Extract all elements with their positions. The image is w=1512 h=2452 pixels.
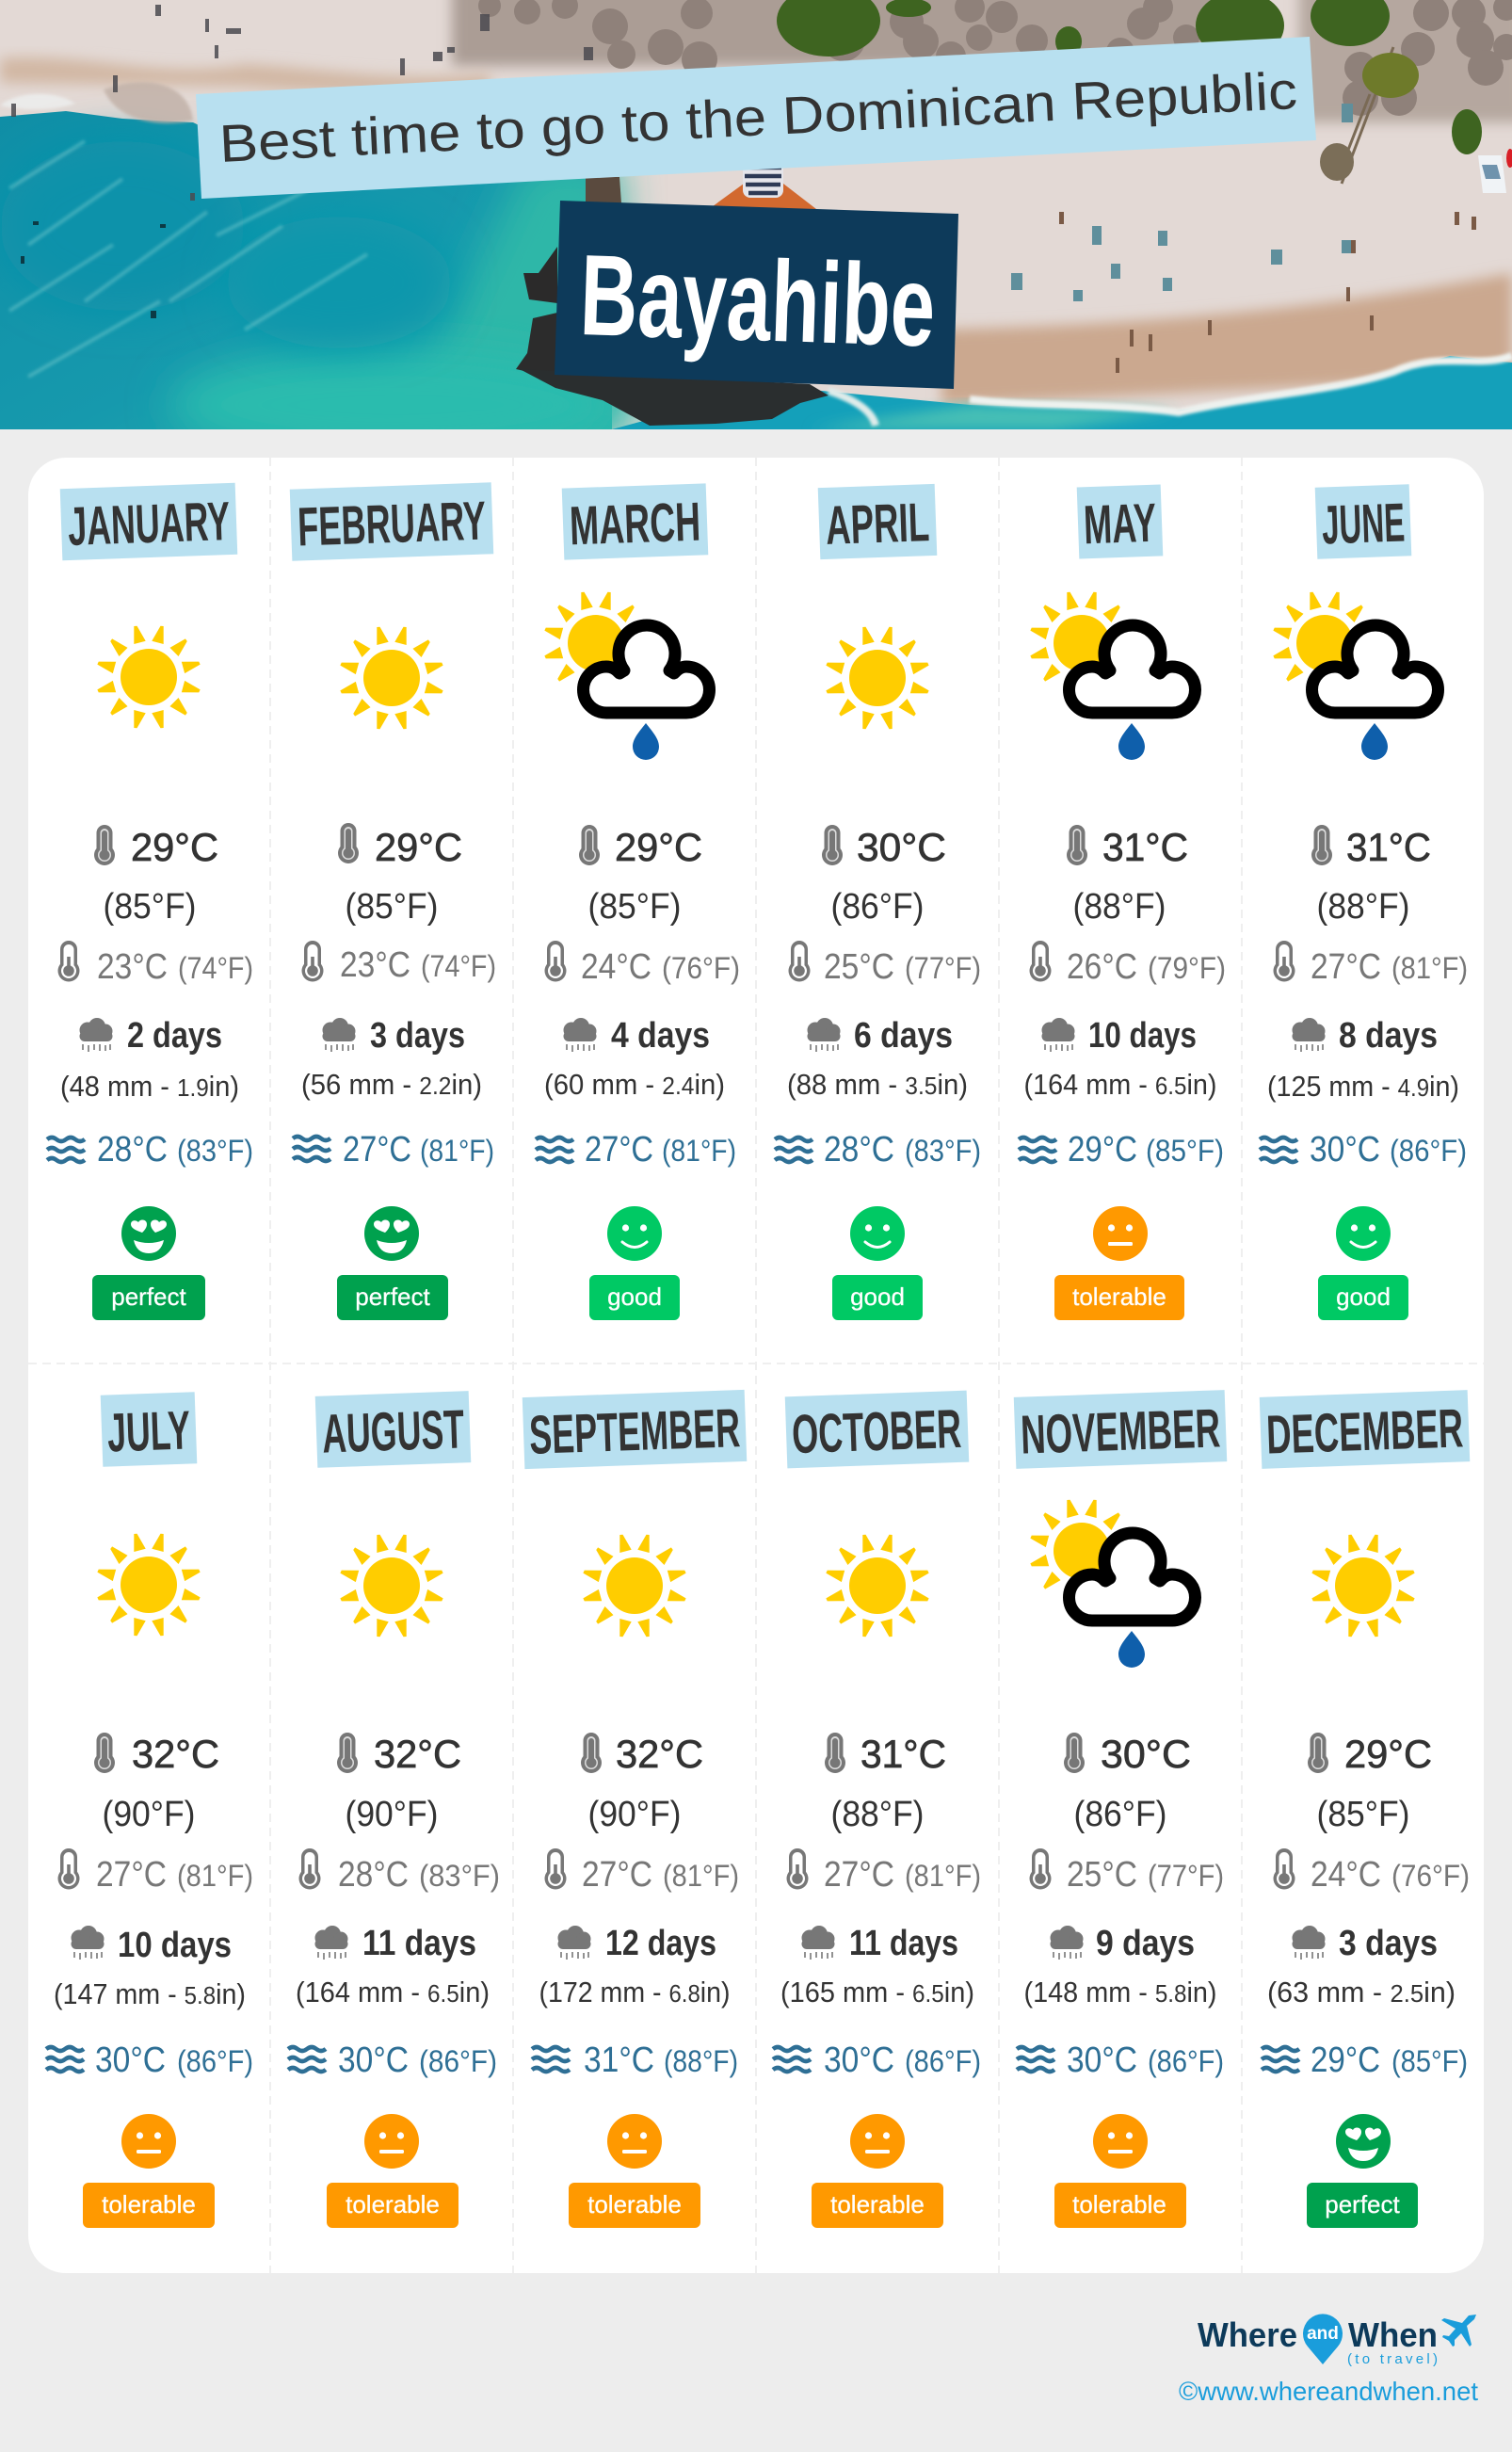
low temperature: (76°F) — [1391, 1859, 1470, 1893]
low temperature: 25°C — [1067, 1855, 1137, 1895]
location banner — [555, 201, 958, 389]
low temperature: (83°F) — [419, 1859, 500, 1893]
rainfall amount: (164 mm - 6.5in) — [1024, 1068, 1216, 1101]
sea temperature: 29°C — [1068, 1130, 1137, 1170]
sea temperature — [1017, 2041, 1224, 2080]
sea temperature: 27°C — [585, 1130, 653, 1170]
rainy days: 8 days — [1339, 1016, 1438, 1056]
high temperature — [1067, 825, 1188, 869]
panel: January — [47, 483, 253, 1320]
rainy days — [314, 1924, 476, 1963]
panel: May — [1019, 484, 1226, 1320]
month heading — [818, 484, 937, 559]
icon: sun — [97, 626, 201, 728]
high temperature — [94, 1732, 219, 1776]
low temperature: (76°F) — [662, 951, 740, 985]
sea temperature — [46, 2041, 253, 2080]
rainfall amount: (165 mm - 6.5in) — [780, 1976, 974, 2008]
low temperature: 23°C — [340, 945, 410, 985]
rainy days — [563, 1016, 710, 1056]
high temperature: 32°C — [132, 1732, 219, 1776]
rainfall amount: (63 mm - 2.5in) — [1267, 1976, 1456, 2008]
icon: sun, cloud and rain drop — [544, 592, 710, 760]
icon: sun, cloud and rain drop — [1030, 592, 1196, 760]
icon: sun — [97, 1534, 201, 1636]
rating badge: perfect: perfect — [355, 1282, 431, 1311]
sea temperature: 30°C — [95, 2041, 166, 2080]
rating badge: tolerable: tolerable — [830, 2190, 925, 2218]
hero photo: aerial beach — [0, 0, 1512, 461]
rainy days: 6 days — [854, 1016, 953, 1056]
rating badge: tolerable: tolerable — [346, 2190, 440, 2218]
rainfall amount: (148 mm - 5.8in) — [1024, 1976, 1216, 2008]
low temperature: 26°C — [1067, 947, 1137, 987]
low temperature: (77°F) — [905, 951, 981, 985]
panel: April — [775, 484, 981, 1320]
low temperature — [1030, 941, 1226, 987]
rating face: perfect — [1336, 2114, 1391, 2169]
rainy days: 10 days — [118, 1926, 232, 1965]
low temperature: (77°F) — [1148, 1859, 1224, 1893]
low temperature: 27°C — [96, 1855, 167, 1895]
high temperature fahrenheit: (85°F) — [587, 887, 682, 927]
rainy days — [1292, 1016, 1438, 1056]
rainy days: 12 days — [605, 1924, 716, 1963]
panel: September — [523, 1390, 747, 2228]
location banner: Bayahibe — [578, 231, 937, 370]
rainy days — [79, 1016, 222, 1056]
high temperature — [338, 823, 462, 869]
high temperature: 30°C — [857, 825, 946, 869]
rainy days — [1292, 1924, 1438, 1963]
logo: Where and When: When — [1348, 2315, 1438, 2354]
sea temperature: (81°F) — [420, 1134, 494, 1168]
rating badge: tolerable — [812, 2183, 943, 2228]
month heading: OCTOBER — [791, 1398, 962, 1465]
rating badge: tolerable: tolerable — [102, 2190, 196, 2218]
rating badge: tolerable — [1054, 2183, 1186, 2228]
icon: map pin with and — [1303, 2314, 1343, 2364]
month heading: NOVEMBER — [1020, 1397, 1221, 1466]
panel: climate table card — [28, 458, 1484, 2273]
rainfall amount: (172 mm - 6.8in) — [539, 1976, 731, 2008]
sea temperature — [532, 2041, 738, 2080]
title banner: Best time to go to the Dominican Republic — [217, 60, 1298, 173]
month heading: JULY — [106, 1399, 191, 1464]
high temperature: 32°C — [374, 1732, 461, 1776]
rating badge: good: good — [1336, 1282, 1391, 1311]
rating badge: tolerable — [327, 2183, 458, 2228]
low temperature — [787, 1848, 981, 1895]
sea temperature: (88°F) — [664, 2044, 738, 2078]
sea temperature — [293, 1130, 494, 1170]
panel: February — [290, 482, 496, 1320]
rating face: good — [607, 1206, 662, 1261]
rainy days: 11 days — [849, 1924, 958, 1963]
sea temperature: (86°F) — [177, 2044, 253, 2078]
rainy days — [557, 1924, 716, 1963]
rating badge: tolerable: tolerable — [1072, 1282, 1166, 1311]
rainy days — [802, 1924, 958, 1963]
sea temperature: (83°F) — [177, 1134, 253, 1168]
low temperature — [789, 941, 981, 987]
rainfall amount: (56 mm - 2.2in) — [301, 1068, 482, 1101]
icon: sun — [1311, 1535, 1415, 1637]
logo: Where and When: (to travel) — [1347, 2351, 1438, 2367]
icon: sun — [826, 1535, 929, 1637]
month heading — [290, 482, 493, 561]
rainy days — [1051, 1924, 1195, 1963]
rating badge: perfect: perfect — [111, 1282, 187, 1311]
sea temperature: (86°F) — [419, 2044, 497, 2078]
high temperature fahrenheit: (90°F) — [345, 1795, 439, 1834]
low temperature: (79°F) — [1148, 951, 1226, 985]
month heading: AUGUST — [321, 1398, 465, 1465]
icon: sun, cloud and rain drop — [1273, 592, 1439, 760]
high temperature — [1064, 1732, 1191, 1776]
rating badge: tolerable: tolerable — [1072, 2190, 1166, 2218]
high temperature fahrenheit: (85°F) — [104, 887, 196, 927]
sea temperature: (81°F) — [662, 1134, 736, 1168]
rating badge: tolerable — [569, 2183, 700, 2228]
rating badge: perfect: perfect — [1325, 2190, 1401, 2218]
icon: sun — [583, 1535, 686, 1637]
low temperature — [58, 1848, 253, 1895]
rating badge: good: good — [850, 1282, 905, 1311]
high temperature: 29°C — [615, 825, 702, 869]
sea temperature: (86°F) — [1390, 1134, 1467, 1168]
high temperature: 30°C — [1101, 1732, 1191, 1776]
rating face: tolerable — [364, 2114, 419, 2169]
sea temperature: 28°C — [824, 1130, 894, 1170]
month heading — [1014, 1390, 1227, 1469]
sea temperature: 31°C — [584, 2041, 654, 2080]
high temperature fahrenheit: (86°F) — [830, 887, 925, 927]
high temperature: 29°C — [131, 825, 218, 869]
low temperature: 23°C — [97, 947, 168, 987]
rating badge: good: good — [607, 1282, 662, 1311]
high temperature fahrenheit: (88°F) — [830, 1795, 925, 1834]
month heading: MAY — [1083, 492, 1157, 556]
rating face: tolerable — [1093, 2114, 1148, 2169]
low temperature: 24°C — [1311, 1855, 1381, 1895]
high temperature fahrenheit: (90°F) — [587, 1795, 682, 1834]
month heading — [1077, 484, 1163, 559]
sea temperature: (86°F) — [1148, 2044, 1224, 2078]
rainy days: 3 days — [370, 1016, 465, 1056]
high temperature fahrenheit: (88°F) — [1073, 887, 1166, 927]
sea temperature: (86°F) — [905, 2044, 981, 2078]
sea temperature: 30°C — [824, 2041, 894, 2080]
sea temperature: (83°F) — [905, 1134, 981, 1168]
low temperature — [1030, 1848, 1224, 1895]
low temperature — [1273, 941, 1468, 987]
rainfall amount: (60 mm - 2.4in) — [544, 1068, 725, 1101]
high temperature: 29°C — [375, 825, 462, 869]
month heading — [101, 1392, 197, 1467]
rating badge: good — [832, 1275, 923, 1320]
sea temperature — [775, 1130, 981, 1170]
logo: Where and When — [1198, 2314, 1476, 2367]
sea temperature — [1262, 2041, 1468, 2080]
month heading: SEPTEMBER — [528, 1397, 741, 1466]
rating badge: tolerable — [83, 2183, 215, 2228]
panel: October — [773, 1391, 981, 2228]
rating face: perfect — [121, 1206, 176, 1261]
low temperature: (81°F) — [663, 1859, 739, 1893]
high temperature: 31°C — [1102, 825, 1188, 869]
low temperature: 25°C — [824, 947, 894, 987]
icon: sun, cloud and rain drop — [1030, 1500, 1196, 1668]
rating badge: perfect — [92, 1275, 205, 1320]
panel: August — [288, 1391, 500, 2228]
month heading: MARCH — [569, 492, 701, 557]
sea temperature — [288, 2041, 497, 2080]
sea temperature: (85°F) — [1146, 1134, 1224, 1168]
rainy days — [808, 1016, 953, 1056]
rainy days: 3 days — [1339, 1924, 1438, 1963]
website credit: ©www.whereandwhen.net — [1179, 2377, 1478, 2406]
high temperature — [825, 1732, 946, 1776]
low temperature — [58, 941, 253, 987]
sea temperature — [47, 1130, 253, 1170]
high temperature — [1311, 825, 1431, 869]
high temperature fahrenheit: (90°F) — [102, 1795, 196, 1834]
sea temperature — [773, 2041, 981, 2080]
rainy days — [72, 1926, 232, 1965]
low temperature: 27°C — [824, 1855, 894, 1895]
month heading — [785, 1391, 969, 1468]
rating face: tolerable — [1093, 1206, 1148, 1261]
rating face: tolerable — [121, 2114, 176, 2169]
low temperature — [544, 941, 740, 987]
rainfall amount: (48 mm - 1.9in) — [60, 1070, 239, 1103]
logo: Where and When: Where — [1198, 2315, 1297, 2354]
rating face: tolerable — [607, 2114, 662, 2169]
month heading: FEBRUARY — [297, 491, 487, 557]
sea temperature: (85°F) — [1391, 2044, 1468, 2078]
panel: March — [536, 483, 740, 1320]
high temperature fahrenheit: (86°F) — [1073, 1795, 1167, 1834]
panel: December — [1260, 1390, 1470, 2228]
rating face: perfect — [364, 1206, 419, 1261]
sea temperature — [536, 1130, 736, 1170]
low temperature — [544, 1848, 739, 1895]
rainy days: 11 days — [362, 1924, 476, 1963]
panel: November — [1014, 1390, 1227, 2228]
rainy days: 10 days — [1088, 1016, 1197, 1056]
low temperature: (74°F) — [178, 951, 253, 985]
sea temperature: 28°C — [97, 1130, 168, 1170]
sea temperature — [1260, 1130, 1467, 1170]
panel: July — [46, 1392, 253, 2228]
title banner — [196, 37, 1316, 199]
rainy days: 4 days — [611, 1016, 710, 1056]
rating badge: perfect — [1307, 2183, 1418, 2228]
low temperature: (74°F) — [421, 949, 496, 983]
low temperature: 27°C — [582, 1855, 652, 1895]
icon: map pin with and: and — [1307, 2324, 1339, 2344]
rainy days — [322, 1016, 465, 1056]
sea temperature: 30°C — [1067, 2041, 1137, 2080]
low temperature: 28°C — [338, 1855, 409, 1895]
month heading — [562, 483, 708, 560]
rating face: good — [850, 1206, 905, 1261]
high temperature: 31°C — [1346, 825, 1431, 869]
low temperature: (81°F) — [177, 1859, 253, 1893]
low temperature — [299, 1848, 500, 1895]
low temperature: 27°C — [1311, 947, 1381, 987]
sea temperature: 30°C — [338, 2041, 409, 2080]
icon: sun — [826, 627, 929, 729]
rainy days: 9 days — [1096, 1924, 1195, 1963]
rating badge: perfect — [337, 1275, 448, 1320]
high temperature: 31°C — [861, 1732, 946, 1776]
rating badge: good — [1318, 1275, 1408, 1320]
icon: sun — [340, 1535, 443, 1637]
month heading — [523, 1390, 747, 1469]
low temperature: (81°F) — [1391, 951, 1468, 985]
sea temperature: 29°C — [1311, 2041, 1380, 2080]
low temperature — [1273, 1848, 1470, 1895]
month heading — [1315, 484, 1411, 559]
icon: airplane — [1441, 2315, 1476, 2347]
sea temperature: 27°C — [343, 1130, 411, 1170]
rating badge: tolerable — [1054, 1275, 1184, 1320]
high temperature: 32°C — [616, 1732, 703, 1776]
month heading: JUNE — [1321, 492, 1406, 557]
icon: sun — [340, 627, 443, 729]
rainy days: 2 days — [127, 1016, 222, 1056]
rating badge: tolerable: tolerable — [587, 2190, 682, 2218]
rating badge: good — [589, 1275, 680, 1320]
month heading — [315, 1391, 471, 1468]
high temperature fahrenheit: (85°F) — [345, 887, 439, 927]
rainfall amount: (147 mm - 5.8in) — [54, 1977, 246, 2010]
month heading: JANUARY — [67, 491, 231, 557]
rainy days — [1041, 1016, 1197, 1056]
low temperature — [301, 941, 496, 985]
low temperature: (81°F) — [905, 1859, 981, 1893]
rating face: tolerable — [850, 2114, 905, 2169]
month heading — [60, 483, 237, 560]
rainfall amount: (164 mm - 6.5in) — [296, 1976, 490, 2008]
sea temperature: 30°C — [1310, 1130, 1380, 1170]
panel: June — [1260, 484, 1468, 1320]
rainfall amount: (88 mm - 3.5in) — [787, 1068, 968, 1101]
high temperature: 29°C — [1344, 1732, 1432, 1776]
month heading: APRIL — [825, 492, 930, 557]
high temperature fahrenheit: (88°F) — [1316, 887, 1410, 927]
rainfall amount: (125 mm - 4.9in) — [1267, 1070, 1459, 1103]
high temperature fahrenheit: (85°F) — [1316, 1795, 1410, 1834]
sea temperature — [1019, 1130, 1224, 1170]
low temperature: 24°C — [581, 947, 651, 987]
rating face: good — [1336, 1206, 1391, 1261]
